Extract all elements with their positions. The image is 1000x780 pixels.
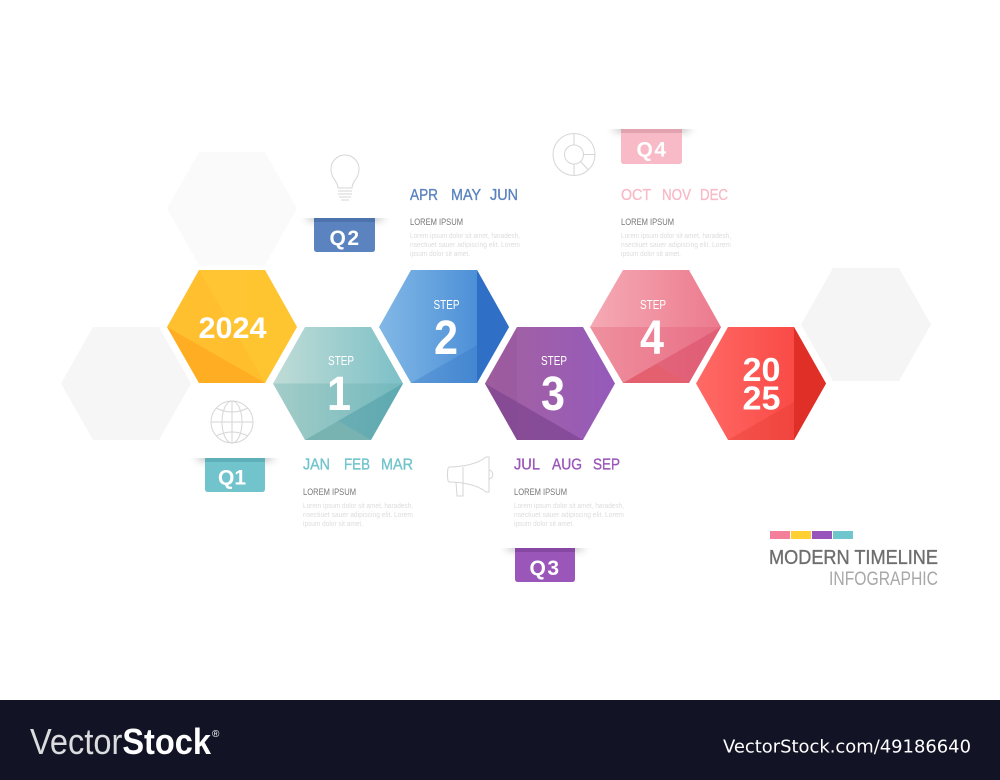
tab: Q2: Q2 (329, 227, 361, 250)
tab: Q4 (612, 125, 692, 164)
icon: globe (211, 401, 253, 443)
step number: 3 (541, 368, 565, 421)
text block: Q1 months (303, 456, 413, 528)
icon: light bulb (331, 155, 359, 200)
ghost hexagon right (801, 268, 931, 381)
text block: Q4 months: LOREM IPSUM (621, 217, 674, 227)
text block: Q1 months: LOREM IPSUM (303, 487, 356, 497)
step label: STEP (434, 298, 460, 312)
text block: Q3 months: ipsum dolor sit amet. (514, 521, 574, 528)
text block: Q2 months: APR (410, 187, 438, 204)
legend title block (769, 531, 938, 590)
step number: 2 (434, 312, 458, 365)
year label: 20 (742, 351, 780, 388)
footer bar: ® (212, 729, 220, 740)
text block: Q2 months: Lorem ipsum dolor sit amet, haradesh, (410, 233, 520, 240)
tab: Q3 (505, 544, 585, 582)
text block: Q2 months: MAY (451, 187, 481, 204)
step number: 1 (327, 368, 351, 421)
text block: Q4 months: OCT (621, 187, 651, 204)
text block: Q1 months: MAR (381, 456, 413, 474)
text block: Q4 months: NOV (662, 187, 691, 204)
year label: 2024 (198, 312, 267, 345)
footer logo: VectorStock (30, 721, 212, 762)
text block: Q2 months: nsectiuet sauer adipiscing elit. Lorem (410, 242, 520, 249)
text block: Q4 months (621, 187, 731, 258)
tab: Q1: Q1 (218, 466, 246, 490)
text block: Q3 months: AUG (552, 456, 582, 474)
text block: Q3 months: SEP (593, 456, 620, 474)
text block: Q4 months: nsectiuet sauer adipiscing elit. Lorem (621, 242, 731, 249)
footer url: VectorStock.com/49186640 (723, 736, 971, 758)
text block: Q1 months: nsectiuet sauer adipiscing elit. Lorem (303, 512, 413, 519)
tab: Q2 (305, 214, 385, 252)
icon: donut chart (553, 134, 595, 176)
text block: Q1 months: Lorem ipsum dolor sit amet, haradesh, (303, 503, 413, 510)
text block: Q1 months: FEB (344, 456, 370, 474)
text block: Q3 months: JUL (514, 456, 540, 474)
ghost hexagon left (61, 327, 191, 440)
tab: Q1 (195, 454, 275, 492)
step number: 4 (640, 312, 664, 365)
text block: Q2 months: JUN (490, 187, 518, 204)
text block: Q4 months: Lorem ipsum dolor sit amet, haradesh, (621, 233, 731, 240)
hexagon: 2025: 25 (742, 380, 780, 416)
text block: Q3 months: Lorem ipsum dolor sit amet, haradesh, (514, 503, 624, 510)
text block: Q3 months (514, 456, 624, 528)
step label: STEP (541, 354, 567, 368)
legend title block: MODERN TIMELINE (769, 547, 938, 569)
hexagon: step 3 (485, 327, 615, 440)
step label: STEP (328, 354, 354, 368)
hexagon: step 1 (273, 327, 403, 440)
tab: Q3: Q3 (529, 557, 561, 580)
legend title block: INFOGRAPHIC (829, 569, 938, 590)
hexagon: step 2 (379, 270, 509, 383)
step label: STEP (640, 298, 666, 312)
footer bar (0, 700, 1000, 780)
text block: Q4 months: DEC (700, 187, 728, 204)
text block: Q3 months: LOREM IPSUM (514, 487, 567, 497)
text block: Q1 months: ipsum dolor sit amet. (303, 521, 363, 528)
text block: Q2 months: ipsum dolor sit amet. (410, 251, 470, 258)
icon: megaphone (448, 457, 493, 496)
text block: Q1 months: JAN (303, 456, 330, 474)
hexagon: step 4 (590, 270, 721, 383)
text block: Q2 months (410, 187, 520, 258)
hexagon: 2024 (167, 270, 297, 383)
ghost hexagon top (167, 152, 297, 265)
text block: Q2 months: LOREM IPSUM (410, 217, 463, 227)
tab: Q4: Q4 (636, 138, 668, 162)
hexagon: 2025 (696, 327, 826, 440)
text block: Q3 months: nsectiuet sauer adipiscing elit. Lorem (514, 512, 624, 519)
text block: Q4 months: ipsum dolor sit amet. (621, 251, 681, 258)
